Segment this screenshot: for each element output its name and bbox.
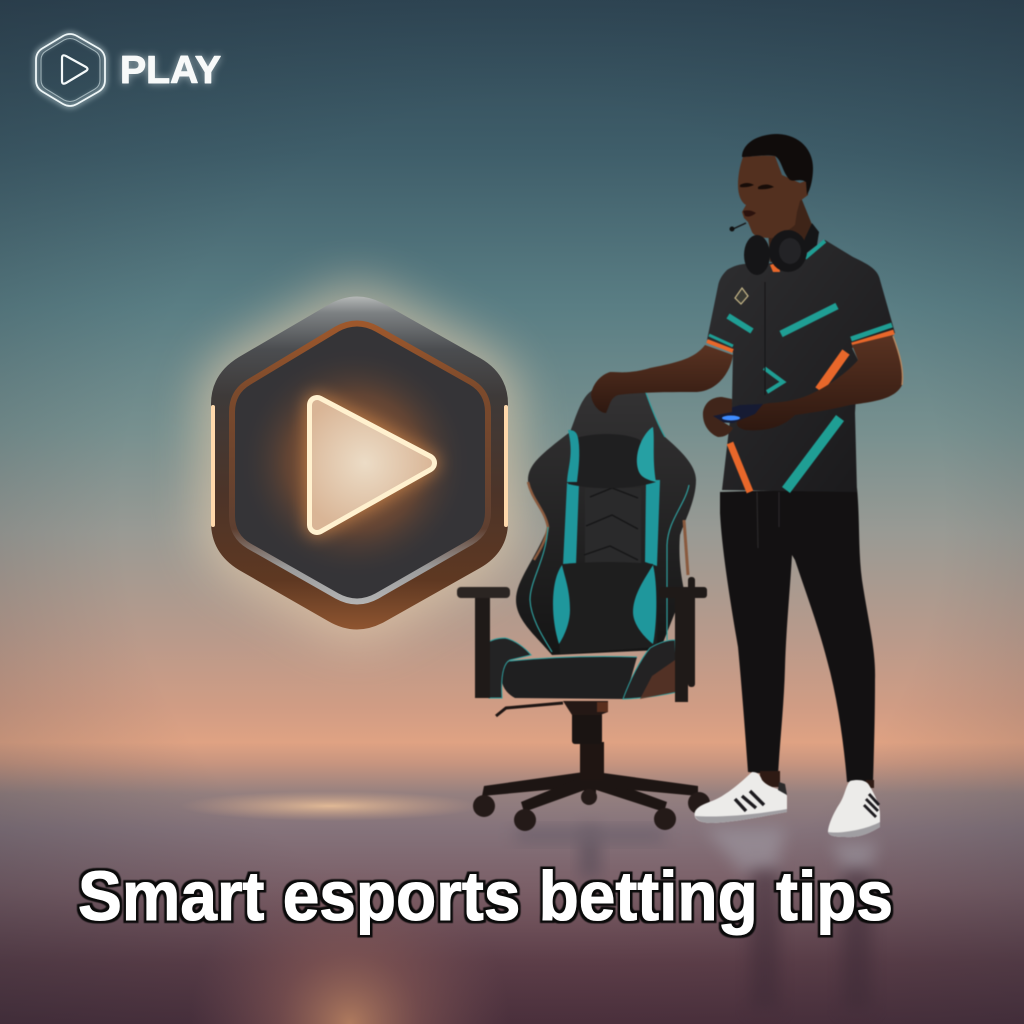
logo hexagon icon [36,34,105,106]
player neck [768,195,815,262]
player shirt stripes [707,241,894,492]
title: Smart esports betting tips [78,857,893,935]
chair armrests [457,577,707,702]
player left shoe [695,772,787,823]
player facial features [740,183,774,217]
badge dark panel [232,324,488,602]
badge outer glow [211,296,508,630]
gaming chair [457,385,710,831]
chair lumbar cushion [553,562,657,654]
player holding hand [703,397,733,437]
chair centre panel with chevrons [584,488,641,566]
badge rim highlights [211,405,508,527]
chair copper edge [528,482,688,575]
player ankles [760,771,874,788]
icon: large hexagon play badge [211,296,508,630]
player drawstrings [757,492,779,548]
player controller [711,404,763,423]
player forearm holding controller [737,335,903,430]
player arm resting on chair [591,345,733,413]
chair teal piping [530,390,689,652]
player headphones [744,223,819,275]
logo wordmark: PLAY [120,49,221,92]
chair base [473,701,710,831]
chair seat [479,638,677,699]
logo glow [36,34,105,106]
player arm rim light [893,336,903,385]
floor reflections [515,828,878,1010]
player pants [720,488,875,782]
player headset microphone [730,223,746,232]
player face [738,156,808,238]
badge inner glow [232,324,488,602]
badge metal frame [211,296,508,630]
player shirt [707,240,895,492]
chair teal side stripes [563,480,660,566]
player right shoe [828,780,880,837]
logo: hexagon play icon with PLAY wordmark [36,34,221,106]
chair backrest [516,385,696,655]
person: esports player [591,134,903,837]
player hair [742,134,813,195]
play triangle [317,405,427,525]
chair head pillow [567,427,656,488]
